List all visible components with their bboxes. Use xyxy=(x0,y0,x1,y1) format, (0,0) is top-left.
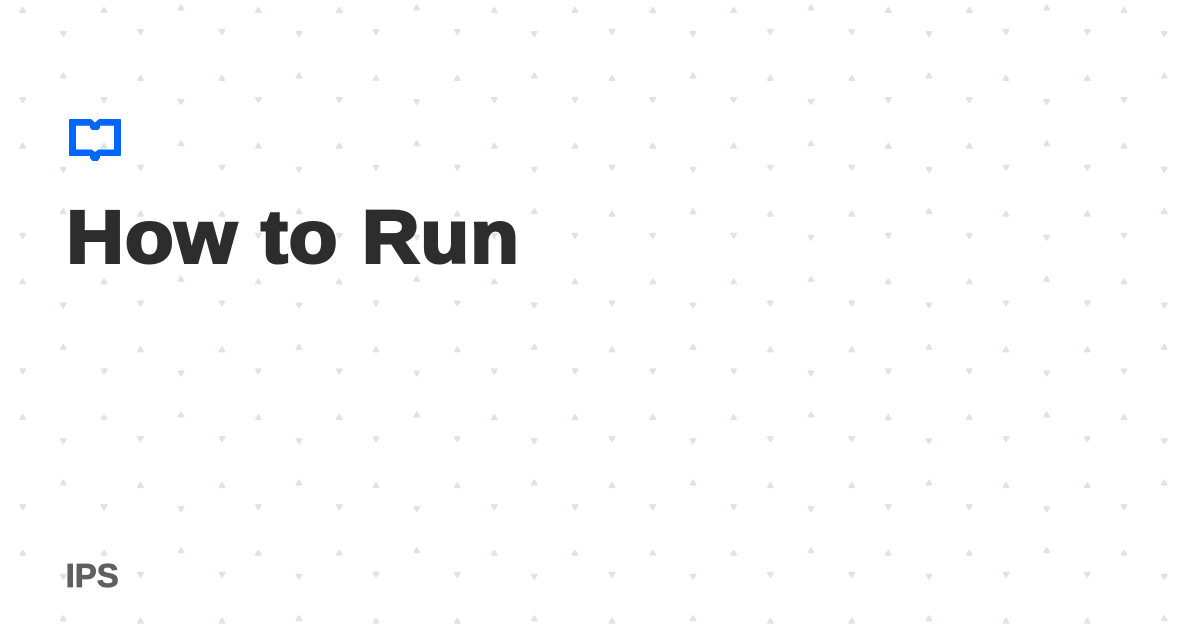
author label: IPS xyxy=(66,557,119,594)
icon: open book xyxy=(69,119,121,161)
title: How to Run xyxy=(66,197,520,279)
